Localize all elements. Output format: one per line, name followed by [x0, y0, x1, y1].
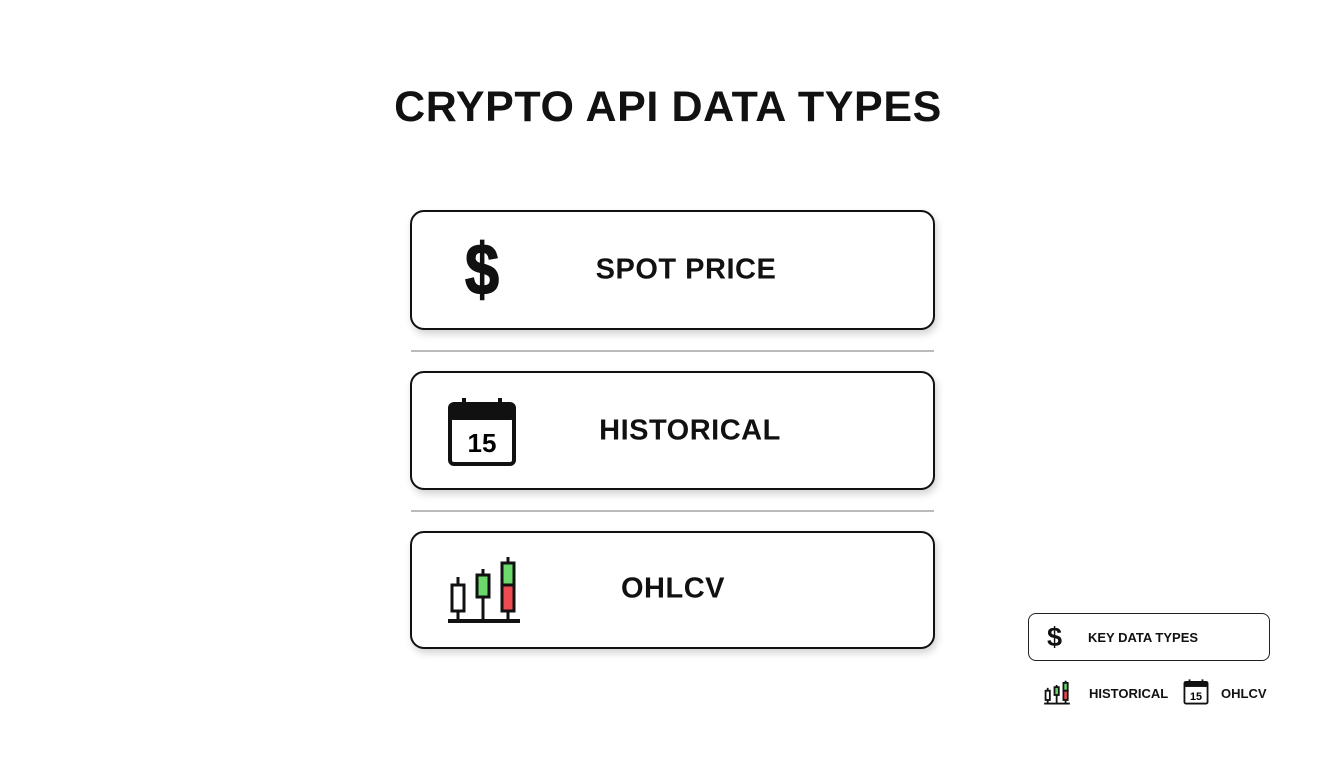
label: spot price: SPOT PRICE: [596, 254, 776, 286]
legend box: key data types: KEY DATA TYPES: [1088, 630, 1198, 645]
legend row: OHLCV: [1221, 686, 1266, 701]
legend row: [1044, 679, 1266, 704]
card: ohlcv: [410, 531, 935, 649]
icon: calendar: [448, 398, 516, 466]
card: historical: [410, 371, 935, 490]
legend box: key data types: [1028, 613, 1270, 661]
label: ohlcv: OHLCV: [621, 572, 725, 604]
card: spot price: [410, 210, 935, 330]
icon: candlesticks: [448, 557, 520, 623]
icon: dollar: $: [465, 230, 499, 310]
title: CRYPTO API DATA TYPES: [394, 83, 942, 131]
icon: calendar: 15: [468, 428, 496, 458]
legend row: HISTORICAL: [1089, 686, 1168, 701]
legend: [1028, 613, 1270, 704]
legend row: 15: [1190, 691, 1202, 703]
legend box: key data types: $: [1047, 622, 1062, 652]
label: historical: HISTORICAL: [599, 414, 781, 446]
